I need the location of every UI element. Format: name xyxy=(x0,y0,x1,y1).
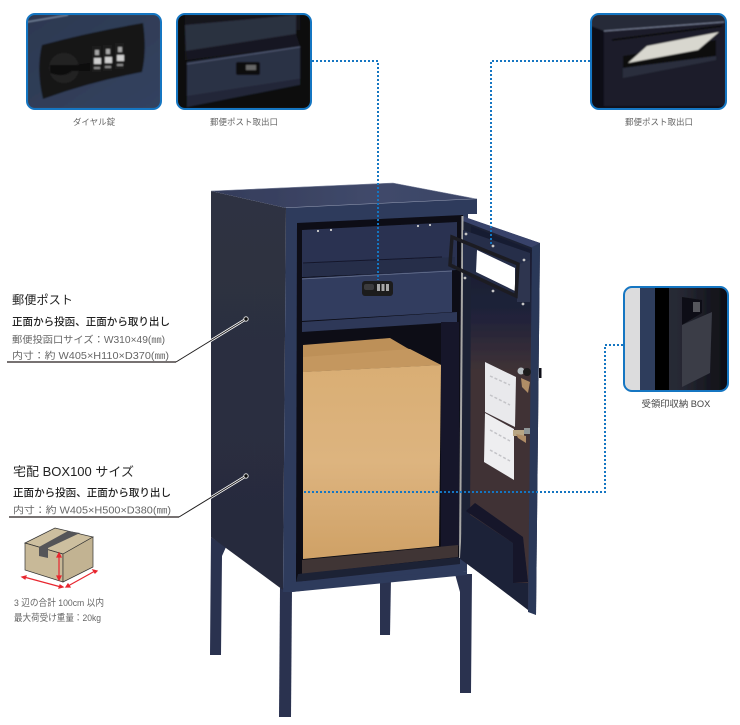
door right rim xyxy=(528,243,540,615)
subheading: 正面から投函、正面から取り出し xyxy=(13,486,171,499)
stamp pocket xyxy=(460,510,528,610)
mail slot window xyxy=(476,250,515,291)
caption: dial lock: ダイヤル錠 xyxy=(73,117,116,127)
callout: parcel box xyxy=(9,464,248,517)
upper interior panel xyxy=(302,222,457,277)
door hinge post xyxy=(459,216,464,558)
photo: dial lock detail xyxy=(27,14,161,109)
heading: 郵便ポスト xyxy=(12,293,73,307)
cabinet interior xyxy=(296,215,463,582)
photo: stamp storage box xyxy=(624,287,728,391)
dotted connector: door slot xyxy=(491,61,590,246)
shelf lip xyxy=(302,312,457,332)
drawer dial lock xyxy=(362,281,393,296)
caption: stamp box: 受領印収納 BOX xyxy=(642,398,710,409)
icon: cardboard box with dimension arrows xyxy=(22,528,97,588)
cardboard box xyxy=(303,338,441,559)
box size note: 3 辺の合計 100cm 以内 xyxy=(14,597,104,609)
photo: mail insertion slot xyxy=(591,14,726,109)
interior floor xyxy=(302,545,458,574)
notice sheets xyxy=(485,362,516,427)
box weight note: 最大荷受け重量：20kg xyxy=(14,612,101,624)
heading: 宅配 BOX100 サイズ xyxy=(13,464,134,479)
inner size: 内寸：約 W405×H500×D380(㎜) xyxy=(13,504,171,516)
drawer front xyxy=(302,270,452,321)
leader line xyxy=(9,474,248,517)
photo: mail retrieval opening xyxy=(177,14,311,109)
lower interior side xyxy=(441,322,459,548)
legs xyxy=(210,537,472,717)
caption: insertion slot: 郵便ポスト取出口 xyxy=(625,117,693,127)
cabinet front frame xyxy=(283,199,477,592)
cabinet top panel xyxy=(211,183,477,208)
dotted connector: drawer lock xyxy=(312,61,378,280)
caption: retrieval opening: 郵便ポスト取出口 xyxy=(210,117,278,127)
cabinet side panel xyxy=(211,191,286,590)
slot size: 郵便投函口サイズ：W310×49(㎜) xyxy=(12,333,165,346)
keys xyxy=(513,368,531,443)
leader line xyxy=(7,317,248,362)
subheading: 正面から投函、正面から取り出し xyxy=(12,315,170,328)
mail slot plate xyxy=(463,230,530,302)
open door xyxy=(450,216,542,615)
door top rim xyxy=(462,216,540,248)
callout: mail post xyxy=(7,293,248,362)
product: parcel locker cabinet xyxy=(210,183,542,717)
door inner panel xyxy=(470,226,532,608)
inner size: 内寸：約 W405×H110×D370(㎜) xyxy=(12,349,169,362)
dotted connector: stamp box xyxy=(304,345,623,492)
bottom rail xyxy=(292,571,467,592)
